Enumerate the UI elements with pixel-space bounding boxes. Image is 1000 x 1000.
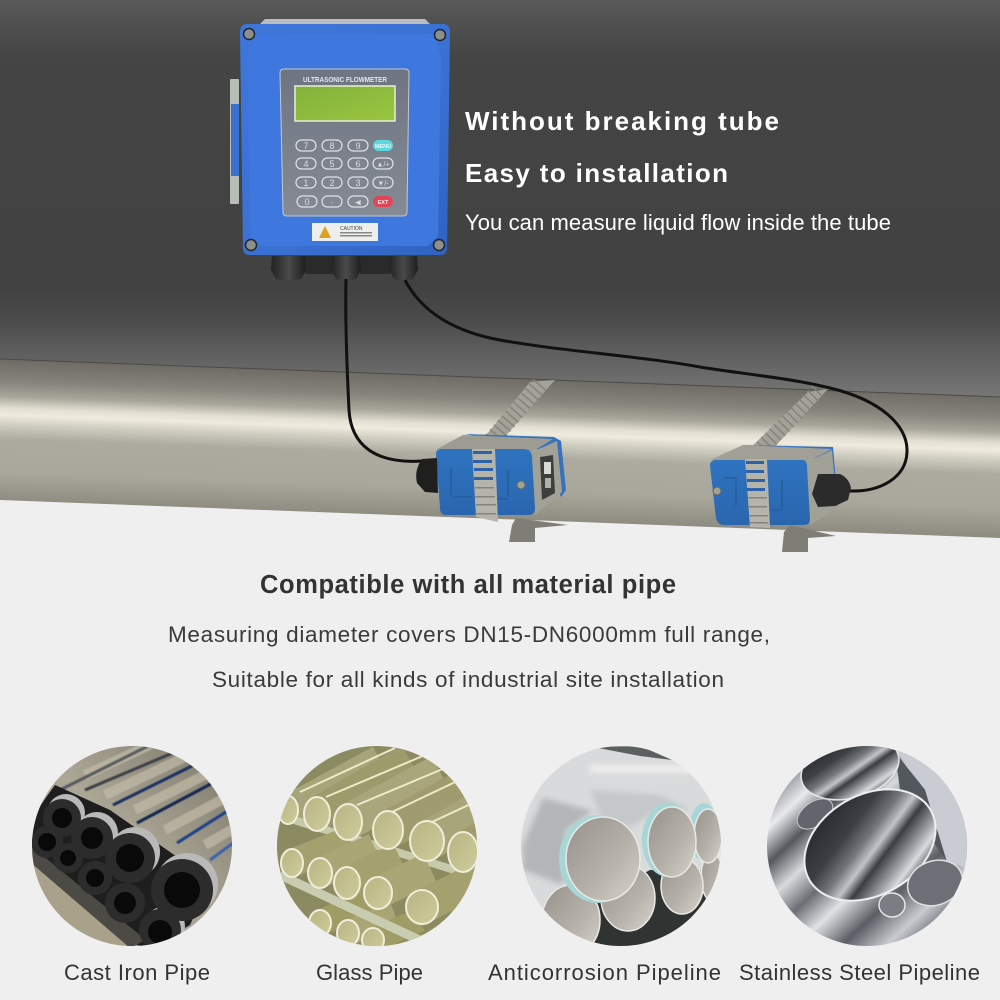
description: diameter range: Measuring diameter covers DN15-DN6000mm full range, [168, 622, 770, 647]
keypad keys: 4 [303, 159, 309, 169]
stainless strap upper [482, 380, 555, 440]
silver rims [47, 794, 218, 946]
keypad keys: 9 [355, 141, 361, 151]
screw [517, 481, 525, 489]
exit key [373, 196, 393, 207]
light backdrop corner [895, 750, 970, 870]
menu key: MENU [375, 144, 391, 150]
mounting foot [782, 525, 836, 552]
flowmeter unit [230, 19, 450, 280]
flanges [31, 799, 213, 951]
keypad keys: 0 [304, 197, 310, 207]
pipe bodies and soft shading [523, 765, 700, 885]
stainless strap front [472, 449, 498, 522]
keypad keys: 2 [329, 178, 335, 188]
caution label [312, 223, 378, 241]
description: industrial site: Suitable for all kinds of industrial site installation [212, 667, 724, 692]
base rail and ground [34, 864, 128, 946]
screws [244, 28, 446, 250]
heading: easy to installation: Easy to installation [465, 158, 728, 188]
enclosure inner bevel [247, 34, 441, 246]
photo: stainless steel pipeline [767, 746, 967, 946]
shelf strip [292, 817, 456, 874]
keypad keys: 8 [329, 141, 335, 151]
label: cast iron pipe: Cast Iron Pipe [64, 960, 210, 985]
right clamp sensor [710, 389, 851, 552]
LCD screen [295, 86, 395, 121]
keypad keys: 5 [329, 159, 335, 169]
tube ends [278, 796, 478, 952]
right cable [405, 280, 907, 491]
keypad keys: 3 [355, 178, 361, 188]
photo: cast iron pipe [30, 744, 240, 951]
photo: glass pipe [277, 746, 477, 946]
cable gland [812, 474, 851, 507]
lower tubes [292, 840, 480, 940]
photo: anticorrosion pipeline [519, 744, 725, 955]
tube highlights [300, 748, 468, 822]
steel pipe [0, 359, 1000, 538]
small tube end [879, 893, 905, 917]
flange stack shadow [32, 785, 193, 946]
sensor connector plate [540, 455, 555, 500]
keypad keys: ▲/+ [377, 162, 389, 168]
upper tube end [800, 746, 900, 801]
dark stripe at top [593, 746, 672, 760]
keypad keys: · [330, 197, 334, 207]
pipe ends upper [566, 807, 722, 901]
blue face grooves [724, 478, 782, 510]
flange bores [38, 808, 200, 944]
menu key [373, 140, 393, 151]
keypad keys [296, 140, 393, 207]
caution label: CAUTION [340, 226, 363, 232]
ground and gaps [590, 870, 725, 948]
blue face grooves [451, 468, 508, 499]
sensor blue face [710, 460, 810, 525]
cable glands [271, 256, 418, 280]
dark backdrop [0, 0, 1000, 400]
keypad keys: ◀ [355, 200, 361, 206]
stainless strap front [745, 459, 770, 528]
enclosure top edge [257, 19, 433, 27]
keypad keys: 1 [303, 178, 309, 188]
label: glass pipe: Glass Pipe [316, 960, 423, 985]
sensor blue face [436, 449, 535, 515]
turquoise coatings [559, 803, 719, 903]
blue back edge [465, 434, 566, 497]
sensor side face [807, 450, 837, 525]
pipe bands [85, 745, 240, 845]
keypad keys: ▼/- [377, 180, 389, 188]
sensor side face [532, 441, 562, 515]
top row tubes [288, 760, 500, 852]
pipe ends lower [543, 809, 721, 942]
label: anticorrosion pipeline: Anticorrosion Pipeline [488, 960, 721, 985]
blue back edge [743, 445, 838, 509]
enclosure body [240, 24, 450, 255]
sensor top face [710, 445, 832, 462]
exit key: EXT [378, 200, 389, 206]
large tube end [804, 788, 937, 902]
keypad keys: 6 [355, 159, 361, 169]
hinge [230, 79, 239, 204]
heading: without breaking tube: Without breaking tube [465, 106, 779, 136]
screw [713, 487, 721, 495]
sensor top face [437, 435, 553, 452]
keypad keys: 7 [303, 141, 309, 151]
right small tube end [906, 859, 962, 906]
left cable [346, 279, 422, 461]
pipe stripes [60, 745, 240, 860]
stainless strap upper [746, 389, 828, 452]
label: stainless steel pipeline: Stainless Steel Pipeline [739, 960, 980, 985]
left tube end [796, 798, 834, 830]
mounting foot [509, 518, 568, 542]
panel title: ULTRASONIC FLOWMETER [303, 77, 387, 84]
keypad panel [280, 69, 409, 216]
left clamp sensor [416, 380, 568, 542]
description: measure liquid flow: You can measure liquid flow inside the tube [465, 210, 891, 235]
heading: compatible: Compatible with all material pipe [260, 571, 676, 599]
cable gland [416, 458, 438, 493]
